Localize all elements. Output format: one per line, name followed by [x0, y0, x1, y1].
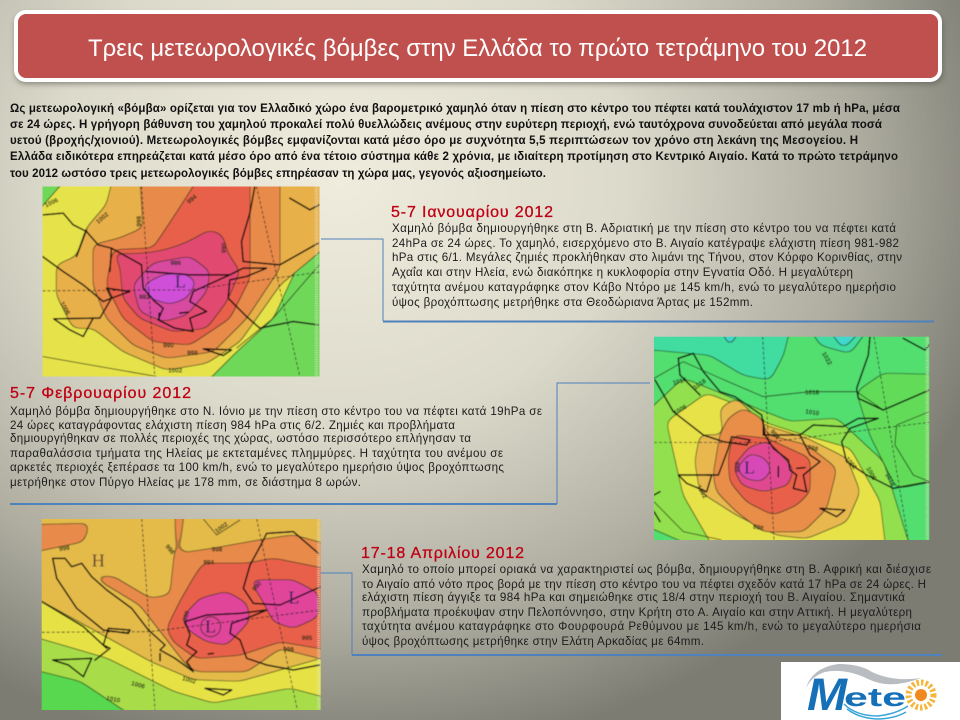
rule: April [352, 654, 942, 656]
map: January pressure chart: 998 [187, 350, 198, 357]
intro paragraph [10, 103, 900, 180]
description: February: μετρήθηκε στον Πύργο Ηλείας με 178 mm, σε διάστημα 8 ωρών. [10, 476, 361, 489]
map: April pressure chart: 998 [212, 547, 223, 554]
description: April [362, 563, 931, 648]
description: April: ταχύτητα ανέμου καταγράφηκε στο Φουρφουρά Ρεθύμνου με 145 km/h, ενώ το μεγαλύτερο ημερήσια [362, 620, 921, 633]
map: February pressure chart: 986 [734, 461, 741, 472]
map: April pressure chart: 995 [302, 635, 313, 642]
description: April: το Αιγαίο από νότο προς βορά με την πίεση στο κέντρο του να πέφτει σχεδόν κατά 17 hPa σε 24 ώρες. Η [362, 578, 926, 591]
map: February pressure chart: 1002 [695, 484, 708, 500]
map: February pressure chart: L [744, 457, 755, 477]
map: February pressure chart: 998 [752, 523, 764, 533]
connector: January map to text [321, 239, 383, 321]
intro paragraph: Ως μετεωρολογική «βόμβα» ορίζεται για τον Ελλαδικό χώρο ένα βαρομετρικό χαμηλό όταν η πίεση στο κέντρο του πέφτει κατά τουλάχιστον 17 mb ή hPa, μέσα [10, 103, 900, 115]
map: February pressure chart: 1018 [692, 378, 708, 392]
map: January pressure chart: 1006 [58, 301, 71, 317]
logo swoosh: blue waves [844, 704, 908, 719]
description: February [10, 405, 542, 489]
heading: January date: 5-7 Ιανουαρίου 2012 [391, 204, 553, 221]
map: February pressure chart: 1006 [864, 466, 878, 482]
description: February: 24 ώρες καταγράφοντας ελάχιστη πίεση 984 hPa στις 6/2. Ζημιές και προβλήματα [10, 419, 455, 432]
description: January: Χαμηλό βόμβα δημιουργήθηκε στη Β. Αδριατική με την πίεση στο κέντρο του να πέφτει κατά [392, 222, 896, 235]
map: February pressure chart: 1014 [672, 376, 688, 387]
map: February pressure chart [654, 336, 930, 540]
description: April: προβλήματα προέκυψαν στην Πελοπόννησο, στην Κρήτη στο Α. Αιγαίο και στην Αττική. Η μεγαλύτερη [362, 606, 912, 619]
map: January pressure chart: 990 [221, 242, 228, 253]
map: February pressure chart: 1022 [820, 351, 833, 367]
rule: January [383, 320, 934, 322]
title banner [15, 12, 943, 84]
description: January [392, 222, 902, 309]
panel: February 2012 event text [10, 385, 542, 489]
logo wordmark: M [807, 669, 849, 720]
intro paragraph: σε 24 ώρες. Η γρήγορη βάθυνση του χαμηλού προκαλεί πολύ θυελλώδεις ανέμους στην ευρύτερη περιοχή, ενώ ταυτόχρονα συνοδεύεται από μεγάλα ποσά [10, 119, 882, 131]
logo: Meteo: ete [844, 682, 906, 712]
map: January pressure chart: 1002 [168, 368, 183, 374]
description: April: ύψος βροχόπτωσης μετρήθηκε στην Ελάτη Αρκαδίας με 64mm. [362, 635, 704, 648]
description: April: Χαμηλό το οποίο μπορεί οριακά να χαρακτηριστεί ως βόμβα, δημιουργήθηκε στη Β. Αφρική και διέσχισε [362, 563, 931, 576]
connector: April map to text [320, 573, 352, 655]
description: February: παραθαλάσσια τμήματα της Ηλείας με εκτεταμένες πλημμύρες. Η ταχύτητα του ανέμου σε [10, 447, 503, 460]
description: January: hPa στις 6/1. Μεγάλες ζημιές προκλήθηκαν στο λιμάνι της Τήνου, στον Κόρφο Κορινθίας, στην [392, 251, 902, 264]
description: January: ύψος βροχόπτωσης μετρήθηκε στα Θεοδώριανα Άρτας με 152mm. [392, 296, 753, 309]
map: January pressure chart: 986 [170, 260, 182, 267]
map: January pressure chart: 1002 [95, 211, 111, 226]
description: January: ταχύτητα ανέμου καταγράφηκε στον Κάβο Ντόρο με 145 km/h, ενώ το μεγαλύτερο ημερήσιο [392, 281, 896, 294]
map: February pressure chart: 998 [807, 444, 819, 453]
map: April pressure chart: 1006 [130, 680, 146, 691]
map: April pressure chart: 994 [203, 559, 214, 566]
description: January: 24hPa σε 24 ώρες. Το χαμηλό, εισερχόμενο στο Β. Αιγαίο κατέγραψε ελάχιστη πίεση 981-982 [392, 237, 899, 250]
description: April: ελάχιστη πίεση άγγιξε τα 984 hPa και σημειώθηκε στις 18/4 στην περιοχή του Β. Αιγαίου. Σημαντικά [362, 591, 905, 604]
map: February pressure chart: 1010 [805, 408, 820, 417]
description: February: Χαμηλό βόμβα δημιουργήθηκε στο Ν. Ιόνιο με την πίεση στο κέντρο του να πέφτει κατά 19hPa σε [10, 405, 542, 418]
intro paragraph: υετού (βροχής/χιονιού). Μετεωρολογικές βόμβες εμφανίζονται κατά μέσο όρο με συχνότητα 5,5 περιπτώσεων τον χρόνο στη λεκάνη της Μεσογείου. Η [10, 135, 858, 147]
map: April pressure chart: L [205, 616, 216, 636]
map: April pressure chart: 998 [59, 545, 71, 553]
map: April pressure chart: 990 [251, 580, 264, 593]
map: April pressure chart: 998 [164, 543, 176, 556]
map: January pressure chart: 990 [163, 342, 174, 350]
map: April pressure chart: 1002 [181, 675, 197, 686]
panel: January 2012 event text [391, 204, 902, 309]
map: January pressure chart: 994 [186, 193, 199, 206]
map: February pressure chart: 1002 [843, 456, 858, 471]
map: February pressure chart: 1006 [673, 403, 689, 417]
map: January pressure chart: 982 [139, 294, 150, 301]
connector: February map to text [557, 383, 650, 504]
map: April pressure chart: 998 [283, 647, 294, 654]
map: April pressure chart: H [92, 551, 105, 571]
title text: Τρεις μετεωρολογικές βόμβες στην Ελλάδα το πρώτο τετράμηνο του 2012 [88, 35, 867, 62]
map: April pressure chart: 1002 [214, 521, 230, 535]
panel: April 2012 event text [361, 545, 931, 648]
intro paragraph: του 2012 ωστόσο τρεις μετεωρολογικές βόμβες επηρέασαν τη χώρα μας, γεγονός αξιοσημείωτο. [10, 168, 546, 180]
map: January pressure chart: 998 [136, 215, 143, 226]
intro paragraph: Ελλάδα ειδικότερα επηρεάζεται κατά μέσο όρο από ένα τέτοιο σύστημα κάθε 2 χρόνια, με ιδιαίτερη προτίμηση στο Κεντρικό Αιγαίο. Κατά το πρώτο τετράμηνο [10, 151, 898, 163]
map: February pressure chart: 994 [768, 428, 781, 441]
map: February pressure chart: 1014 [883, 472, 897, 488]
heading: April date: 17-18 Απριλίου 2012 [361, 545, 524, 562]
rule: February [10, 503, 557, 505]
map: April pressure chart: 1010 [106, 695, 121, 704]
heading: February date: 5-7 Φεβρουαρίου 2012 [10, 385, 191, 402]
map: April pressure chart: 990 [182, 610, 191, 622]
description: January: Αχαΐα και στην Ηλεία, ενώ διακόπηκε η κυκλοφορία στην Εγνατία Οδό. Η μεγαλύτερη [392, 266, 853, 279]
map: January pressure chart: 1006 [44, 197, 60, 209]
description: February: δημιουργήθηκαν σε πολλές περιοχές της χώρας, ωστόσο περισσότερο επλήγησαν τα [10, 432, 471, 445]
logo sun [908, 682, 934, 708]
description: February: αρκετές περιοχές ξεπέρασε τα 100 km/h, ενώ το μεγαλύτερο ημερήσιο ύψος βροχόπτωσης [10, 461, 504, 474]
map: January pressure chart [42, 186, 320, 376]
map: February pressure chart: 1018 [805, 389, 820, 396]
map: April pressure chart: L [288, 587, 299, 607]
logo: Meteo [781, 662, 960, 720]
map: April pressure chart [42, 519, 321, 710]
map: January pressure chart: L [175, 272, 186, 292]
logo swoosh: grey [806, 664, 921, 688]
